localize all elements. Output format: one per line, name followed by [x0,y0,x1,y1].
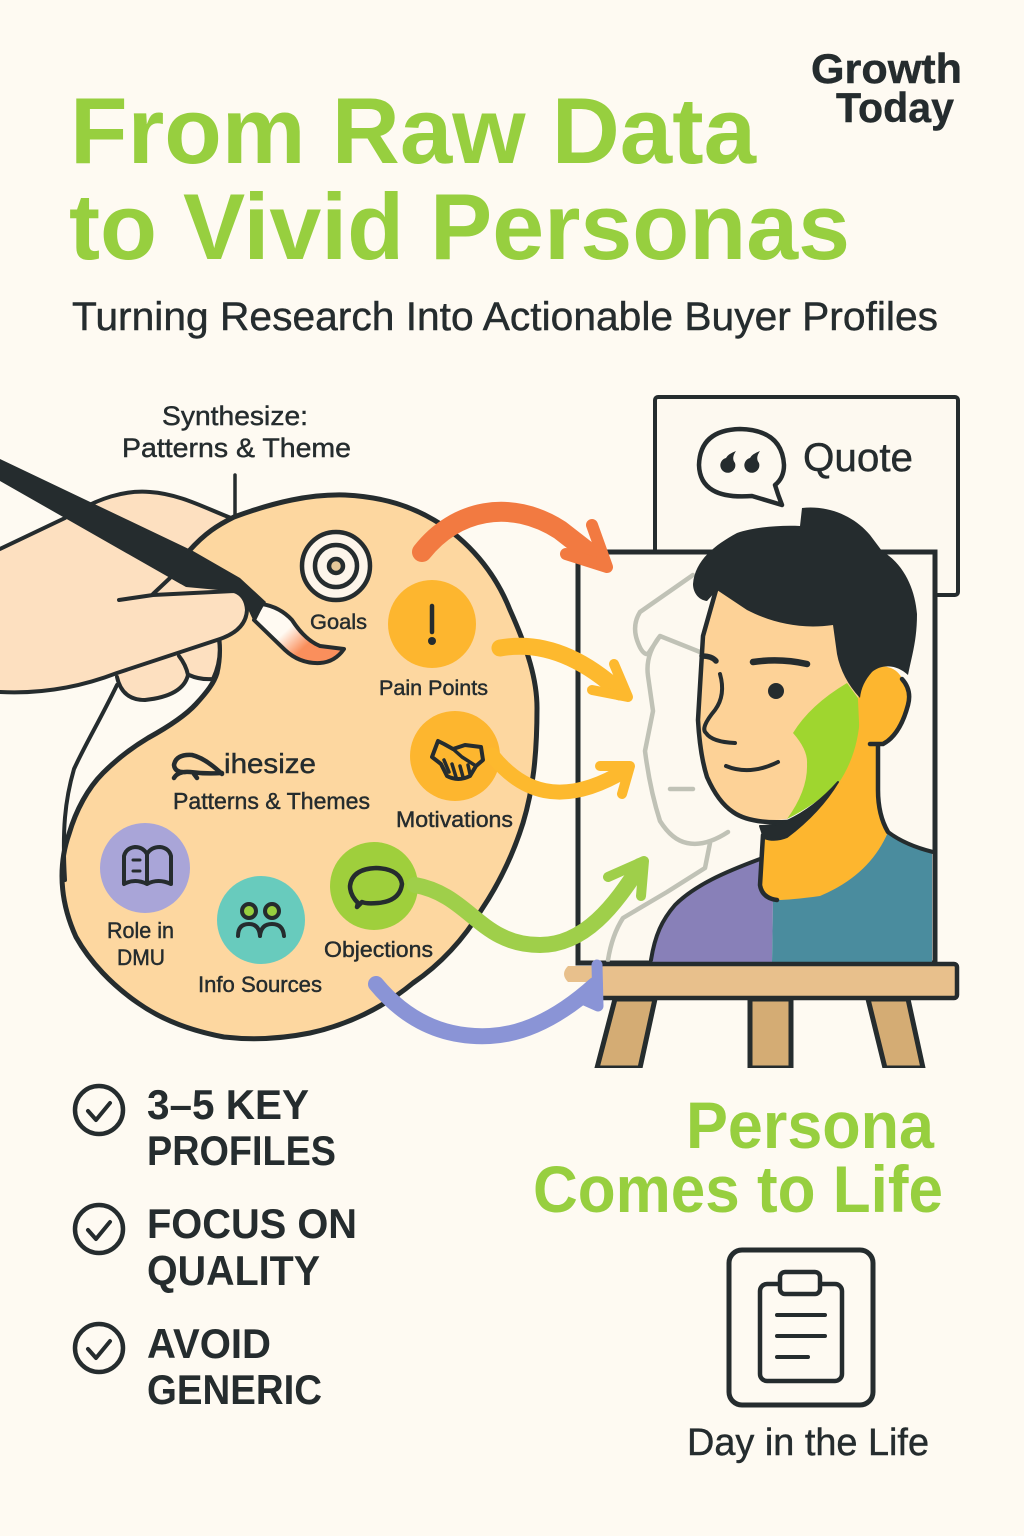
index finger and hand front [0,518,246,693]
palette [62,495,537,1039]
hair [693,508,917,698]
checklist [75,1081,357,1413]
title [69,78,850,279]
item: 3-5 key profiles [75,1081,336,1174]
label: garbled synthesize [174,748,316,779]
label: day in the life: Day in the Life [687,1422,929,1464]
face outline [698,590,787,822]
icon: clipboard [729,1250,873,1405]
paintbrush [0,459,344,663]
arrow: motivations to portrait [492,755,630,794]
label: goals: Goals [310,611,367,634]
item: avoid generic: GENERIC [147,1366,322,1413]
ear [858,667,909,744]
panel: quote card [655,397,958,595]
title: From Raw Data [70,78,757,183]
icon: info sources people [217,876,305,964]
arrow: info sources to ledge [376,965,598,1036]
title: to Vivid Personas [69,174,850,279]
arrow: goals to portrait [422,512,607,567]
label: role in DMU: Role in [107,918,174,943]
label: garbled synthesize: ihesize [224,748,316,779]
heading: synthesize callout: Patterns & Theme [122,433,351,463]
label: role in DMU: DMU [117,945,165,970]
logo: Growth Today: Growth [811,45,962,92]
label: quote: Quote [803,436,913,480]
shirt purple [650,859,773,962]
neck [760,716,888,900]
icon: motivations handshake [410,711,500,801]
easel ledge [564,964,957,998]
icon: quote bubble [699,429,784,505]
panel: canvas [578,508,935,963]
item: focus on quality: FOCUS ON [147,1200,357,1247]
heading: synthesize callout: Synthesize: [162,401,308,431]
face [698,590,860,820]
icon: objections speech bubble [330,842,418,930]
subtitle: Turning Research Into Actionable Buyer Profiles [72,295,938,339]
label: info sources: Info Sources [198,972,322,997]
jaw beard [760,782,838,840]
cheek green [787,683,860,819]
icon: pain points [388,580,476,668]
label: motivations: Motivations [396,807,513,832]
heading: persona comes to life [533,1088,943,1226]
illustration: palette and hand [0,459,537,1039]
label: role in DMU [107,918,174,970]
logo: Growth Today [811,45,962,131]
illustration: easel legs [590,999,935,1074]
label: patterns and themes: Patterns & Themes [173,788,370,814]
heading: persona comes to life: Comes to Life [533,1152,943,1226]
shirt teal [772,832,932,962]
item: avoid generic: AVOID [147,1320,271,1367]
item: 3-5 key profiles: PROFILES [147,1127,336,1174]
arrow: pain points to portrait [500,646,628,697]
sketch outline [608,575,728,960]
label: pain points: Pain Points [379,676,488,700]
facial features [702,656,807,770]
heading: synthesize callout [122,401,351,516]
logo: Growth Today: Today [836,84,955,131]
item: avoid generic [75,1320,322,1413]
curled finger [117,638,220,700]
arrow: objections to portrait [415,861,644,945]
item: focus on quality [75,1200,357,1294]
heading: persona comes to life: Persona [686,1088,935,1162]
item: focus on quality: QUALITY [147,1247,320,1294]
icon: role book [100,823,190,913]
label: objections: Objections [324,937,433,962]
hand back [0,492,240,693]
icon: goals target [302,532,370,600]
item: 3-5 key profiles: 3–5 KEY [147,1081,309,1128]
